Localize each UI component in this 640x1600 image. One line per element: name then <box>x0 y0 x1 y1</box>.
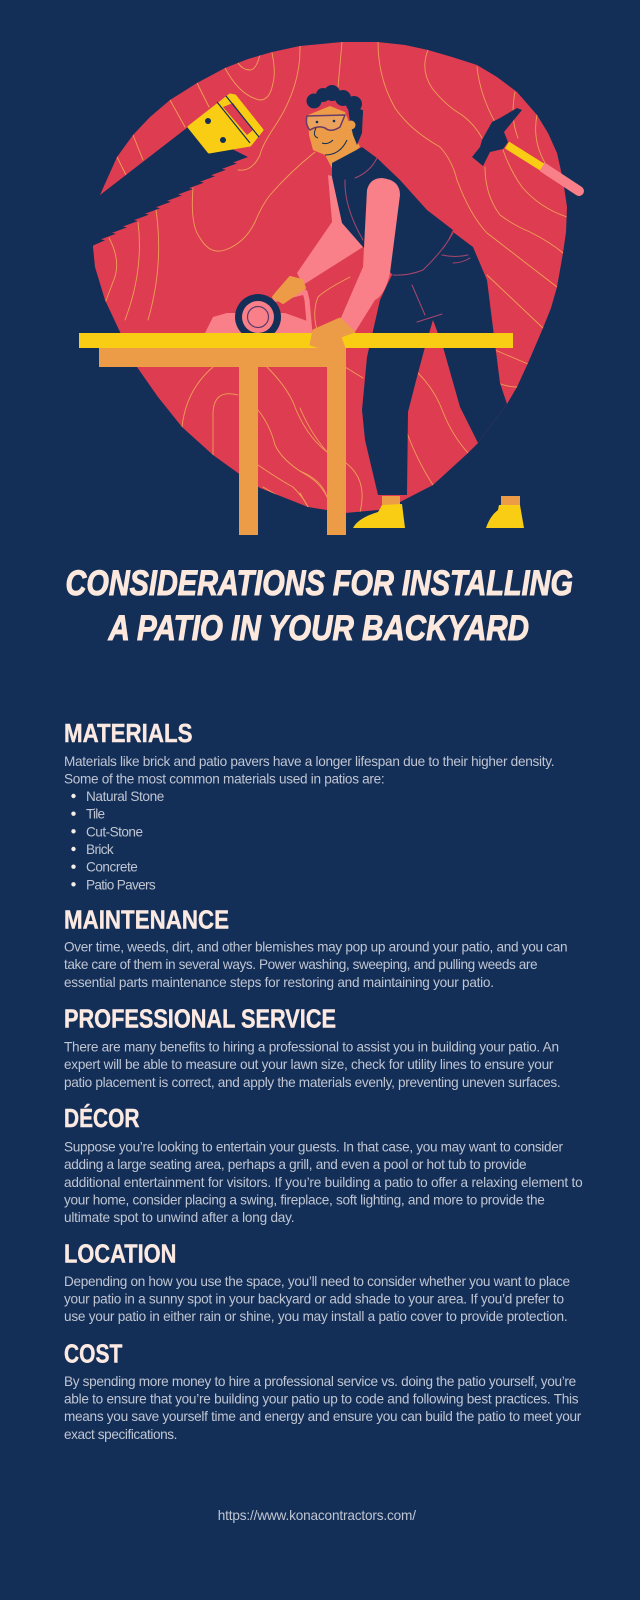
man: boots <box>353 504 524 528</box>
section: cost: COST <box>64 1340 123 1368</box>
man: vest <box>332 147 453 275</box>
section: professional service: expert will be able to measure out your lawn size, check for utility lines to ensure your <box>64 1057 554 1072</box>
section: decor: adding a large seating area, perhaps a grill, and even a pool or hot tub to provide <box>64 1157 527 1172</box>
section: professional service <box>64 1005 561 1090</box>
table frame and legs <box>99 348 346 535</box>
section: materials <box>64 720 554 892</box>
man: neck and face <box>308 106 360 170</box>
title: A PATIO IN YOUR BACKYARD <box>108 609 529 648</box>
materials list: Concrete <box>86 860 138 875</box>
red background blob <box>93 42 567 513</box>
man: curly hair <box>306 85 363 145</box>
hammer <box>472 108 579 191</box>
man: socks <box>382 496 520 506</box>
section: decor <box>64 1104 583 1225</box>
section: cost <box>64 1340 582 1442</box>
materials list: Patio Pavers <box>86 877 156 892</box>
saw blade <box>60 127 248 248</box>
section: location <box>64 1240 570 1324</box>
section: materials: MATERIALS <box>64 720 192 748</box>
materials list: Natural Stone <box>86 789 164 804</box>
man: vest seams <box>345 158 470 322</box>
section: decor: Suppose you’re looking to entertain your guests. In that case, you may want to consider <box>64 1140 563 1154</box>
section: maintenance: take care of them in several ways. Power washing, sweeping, and pulling weeds are <box>64 957 538 972</box>
section: location: Depending on how you use the space, you’ll need to consider whether you want to place <box>64 1274 570 1289</box>
section: professional service: patio placement is correct, and apply the materials evenly, preventing uneven surfaces. <box>64 1075 561 1090</box>
man: front hand <box>310 318 355 348</box>
man: trousers <box>362 232 507 495</box>
saw handle <box>189 95 262 152</box>
materials list <box>71 789 164 892</box>
section: location: LOCATION <box>64 1240 176 1268</box>
materials list: Cut-Stone <box>86 824 143 839</box>
contour lines on blob <box>105 42 567 512</box>
man: ear <box>346 120 356 130</box>
materials list: Tile <box>86 807 105 822</box>
section: cost: exact specifications. <box>64 1427 177 1442</box>
section: professional service: There are many benefits to hiring a professional to assist you in building your patio. An <box>64 1040 559 1054</box>
section: cost: By spending more money to hire a professional service vs. doing the patio yourself, you’re <box>64 1374 576 1389</box>
section: materials: Some of the most common materials used in patios are: <box>64 771 385 786</box>
section: maintenance: Over time, weeds, dirt, and other blemishes may pop up around your patio, and you can <box>64 940 568 954</box>
section: location: use your patio in either rain or shine, you may install a patio cover to provide protection. <box>64 1309 568 1324</box>
materials list: Brick <box>86 842 114 857</box>
man: back arm <box>297 175 363 285</box>
man: front arm <box>337 178 400 332</box>
man: back hand <box>273 277 305 303</box>
section: maintenance: essential parts maintenance steps for restoring and maintaining your patio. <box>64 975 494 990</box>
section: maintenance: MAINTENANCE <box>64 906 229 934</box>
table top <box>79 333 513 348</box>
man: goggles and facial features <box>306 115 347 155</box>
section: decor: ultimate spot to unwind after a long day. <box>64 1210 294 1225</box>
title <box>66 564 573 648</box>
section: maintenance <box>64 906 568 990</box>
section: decor: your home, consider placing a swing, fireplace, soft lighting, and more to provide the <box>64 1192 545 1208</box>
section: cost: means you save yourself time and energy and ensure you can build the patio to meet your <box>64 1409 582 1424</box>
section: decor: DÉCOR <box>64 1104 140 1133</box>
section: decor: additional entertainment for visitors. If you’re building a patio to offer a relaxing element to <box>64 1175 583 1190</box>
illustration: man sawing at a table <box>60 42 579 535</box>
section: materials: Materials like brick and patio pavers have a longer lifespan due to their higher density. <box>64 754 554 769</box>
footer url: https://www.konacontractors.com/ <box>218 1508 416 1523</box>
section: cost: able to ensure that you’re building your patio up to code and following best practices. This <box>64 1392 579 1406</box>
section: professional service: PROFESSIONAL SERVICE <box>64 1005 336 1033</box>
sander tool <box>205 292 312 340</box>
section: location: your patio in a sunny spot in your backyard or add shade to your area. If you’d prefer to <box>64 1292 564 1306</box>
